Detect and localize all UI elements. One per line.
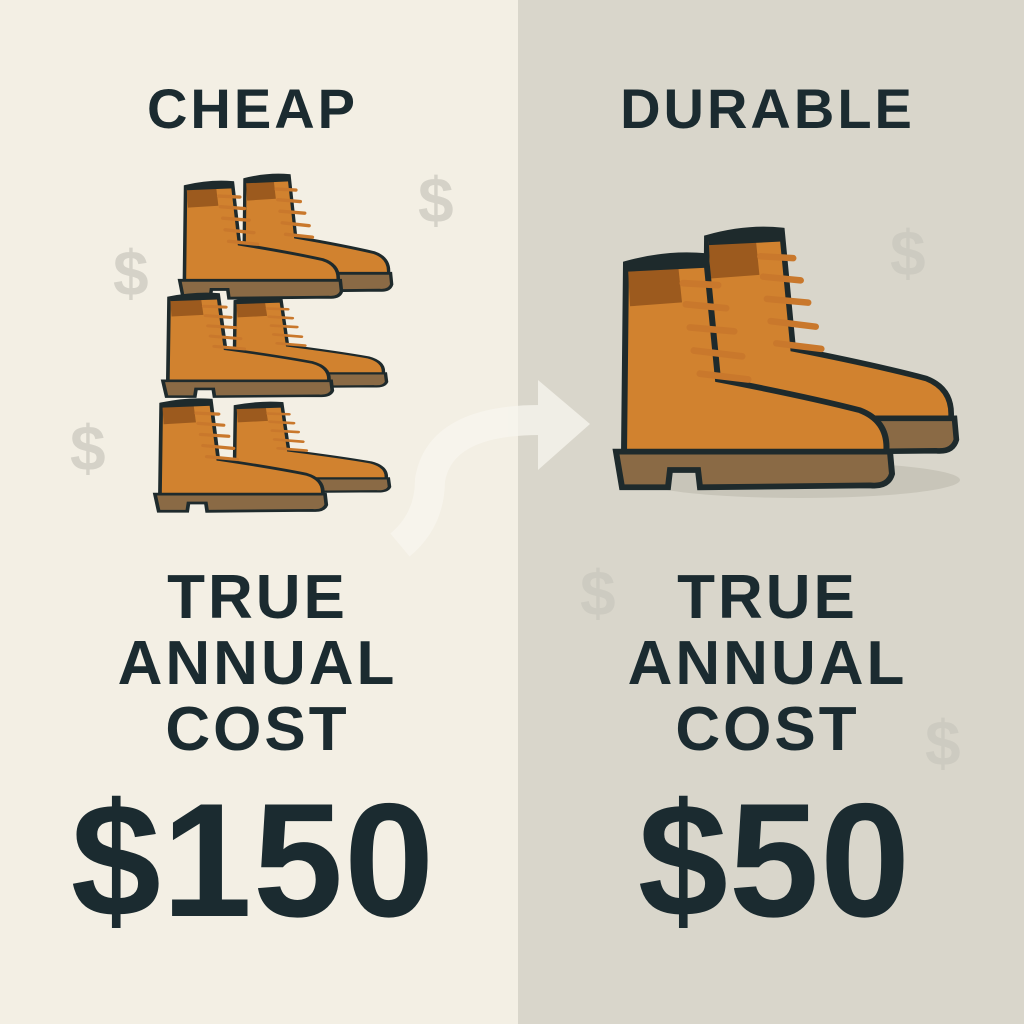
- illustration: durable boots: [616, 229, 960, 498]
- text block: cheap label: COST: [165, 695, 350, 764]
- number: durable cost: $50: [638, 770, 911, 951]
- text block: durable label: [628, 563, 907, 764]
- panel: cheap background: [0, 0, 518, 1024]
- icon: faded dollar signs: $: [70, 412, 106, 484]
- number: cheap cost: $150: [71, 770, 435, 951]
- text block: durable label: COST: [675, 695, 860, 764]
- icon: faded dollar signs: $: [925, 707, 961, 779]
- icon: faded dollar signs: $: [113, 237, 149, 309]
- panel: durable background: [518, 0, 1024, 1024]
- icon: faded dollar signs: $: [890, 217, 926, 289]
- text block: durable label: TRUE: [677, 563, 858, 632]
- text block: cheap label: ANNUAL: [118, 629, 397, 698]
- heading: durable: DURABLE: [620, 77, 915, 140]
- text block: cheap label: TRUE: [167, 563, 348, 632]
- icon: faded dollar signs: $: [580, 557, 616, 629]
- icon: faded dollar signs: [70, 164, 961, 779]
- text block: durable label: ANNUAL: [628, 629, 907, 698]
- heading: cheap: CHEAP: [147, 77, 358, 140]
- arrow: [400, 380, 590, 545]
- icon: faded dollar signs: $: [418, 164, 454, 236]
- illustration: cheap boot stack: [155, 175, 392, 511]
- text block: cheap label: [118, 563, 397, 764]
